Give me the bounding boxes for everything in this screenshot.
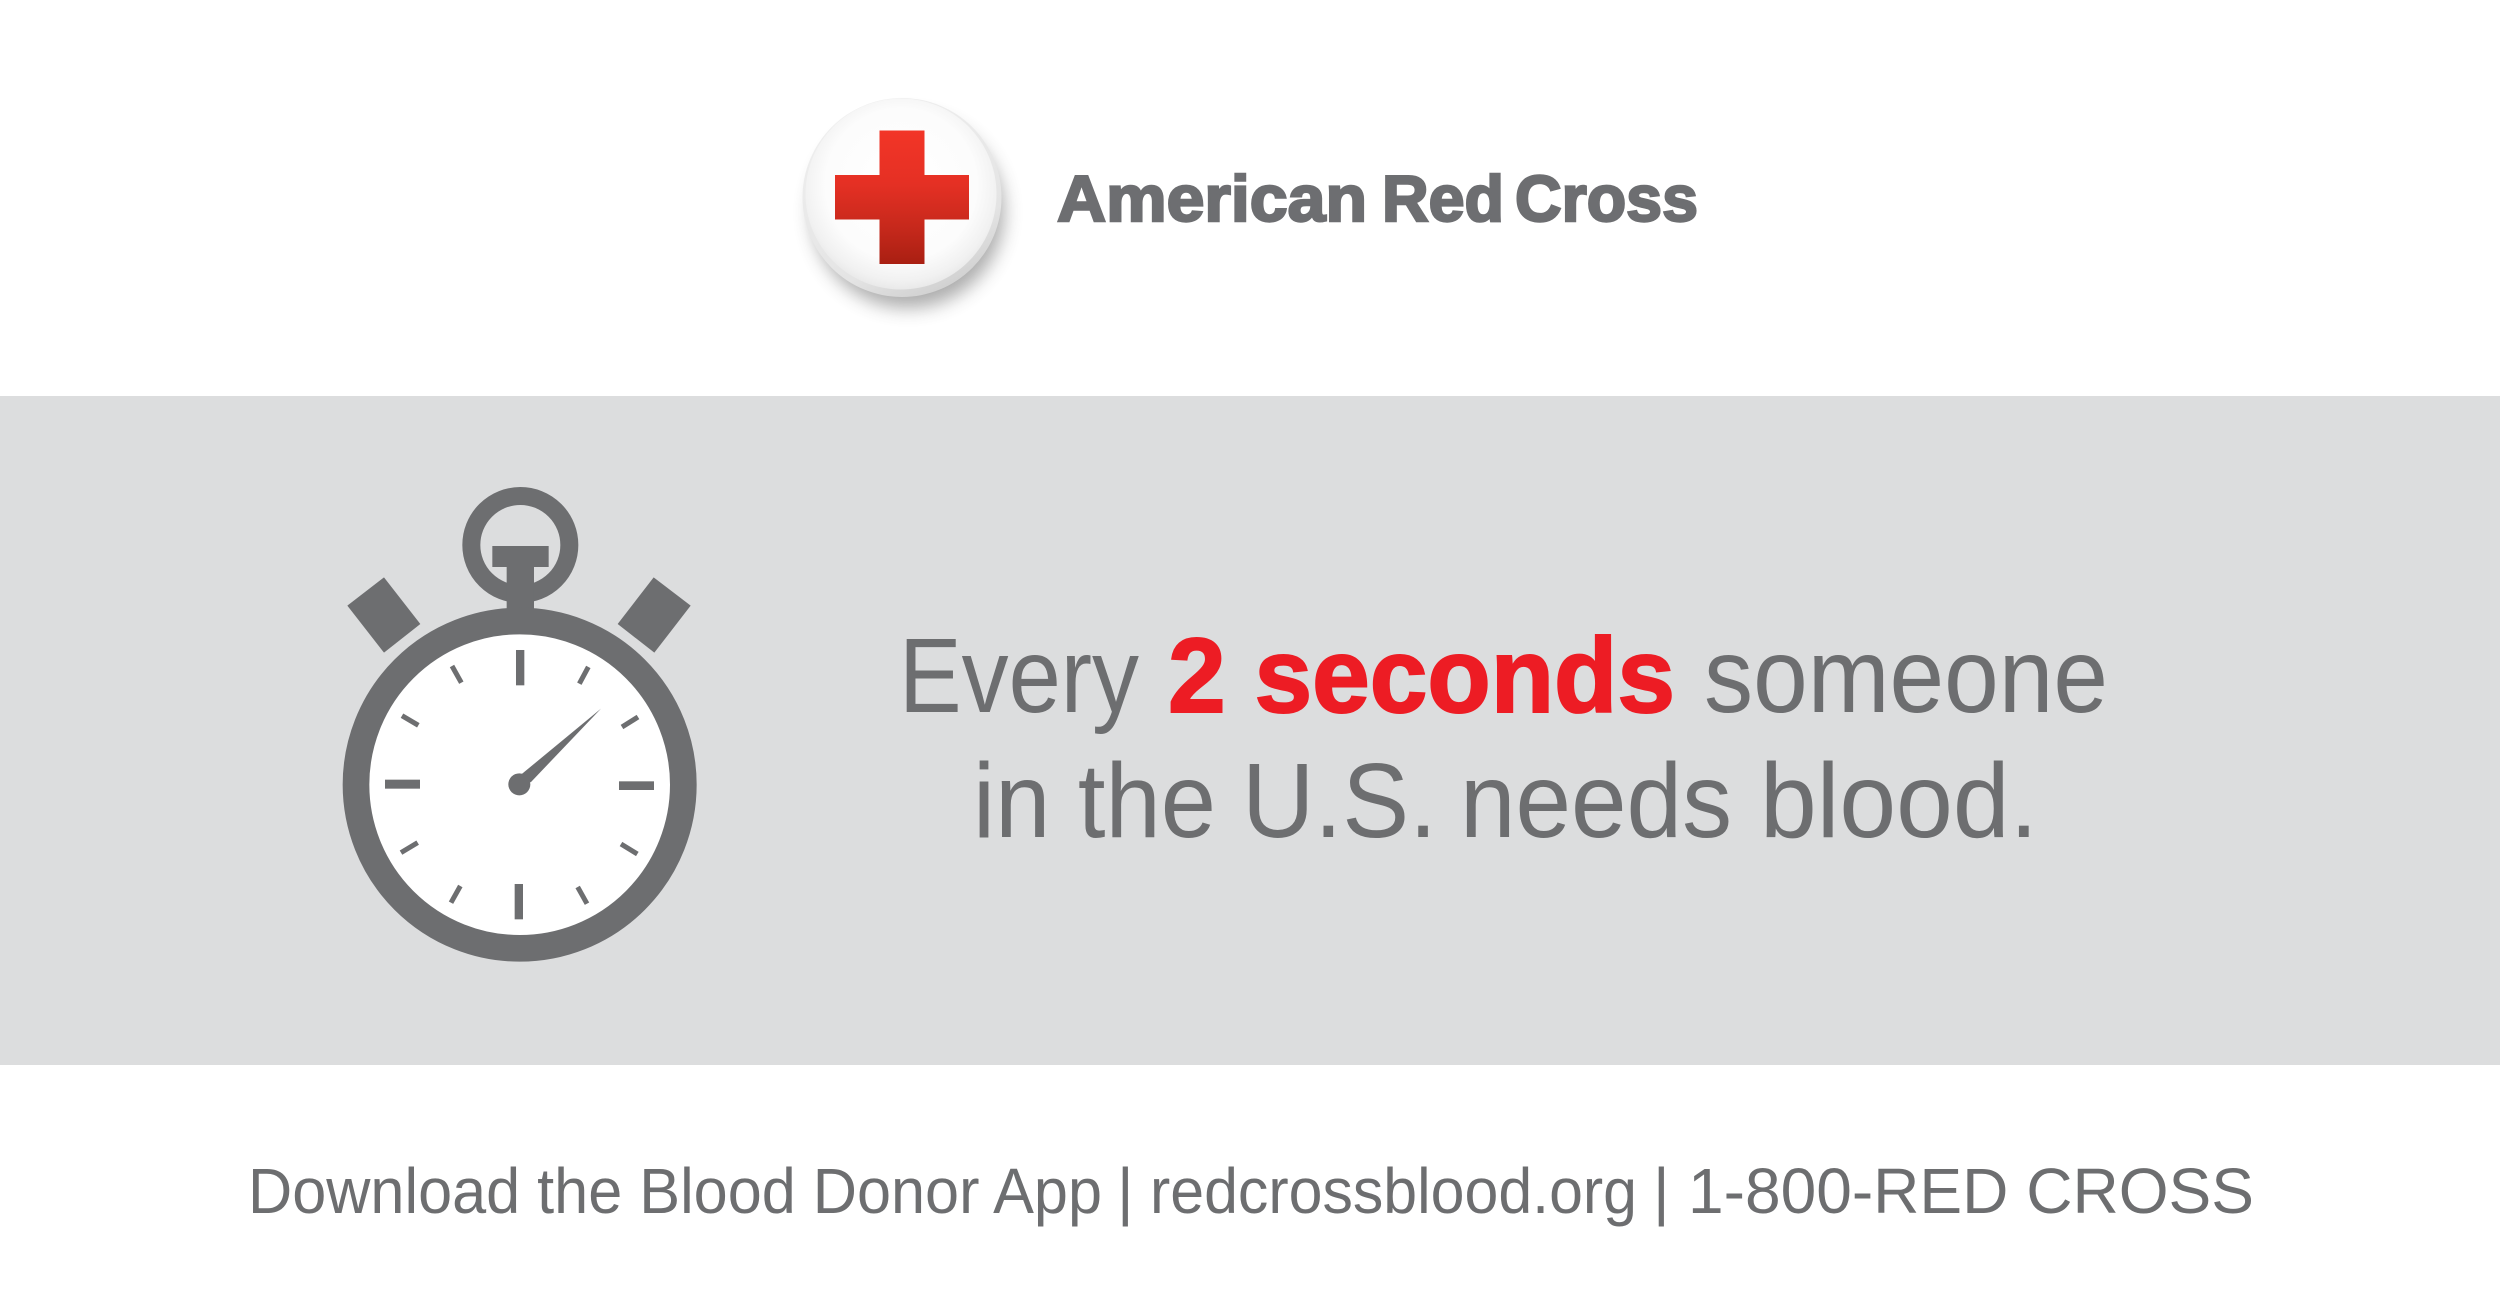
logo wordmark: American xyxy=(1057,162,1367,235)
stopwatch stem xyxy=(492,546,549,613)
headline line 2: U.S. xyxy=(1242,742,1437,860)
headline line 2: in the xyxy=(973,742,1216,860)
headline line 1: someone xyxy=(1704,617,2108,735)
logo wordmark: Cross xyxy=(1515,162,1698,235)
stopwatch crown ring xyxy=(471,496,569,594)
headline line 1 xyxy=(899,617,2108,735)
footer contact line: redcrossblood.org xyxy=(1150,1155,1637,1227)
logo wordmark: Red xyxy=(1382,162,1504,235)
headline xyxy=(899,617,2108,860)
footer contact line: | xyxy=(1117,1155,1134,1227)
panel: grey message band xyxy=(0,396,2500,1065)
icon: red cross badge xyxy=(802,98,1004,308)
headline line 1: 2 seconds xyxy=(1168,617,1675,735)
icon: stopwatch xyxy=(347,496,691,948)
footer contact line: | xyxy=(1653,1155,1670,1227)
left button xyxy=(347,577,420,653)
headline line 2: blood. xyxy=(1760,742,2038,860)
logo: American Red Cross xyxy=(802,98,1698,308)
stopwatch hand xyxy=(508,709,601,795)
headline line 2: needs xyxy=(1460,742,1732,860)
footer contact line: 1-800-RED CROSS xyxy=(1688,1155,2254,1227)
logo wordmark xyxy=(1057,162,1698,235)
headline line 1: Every xyxy=(899,617,1139,735)
footer contact line xyxy=(248,1155,2254,1227)
footer contact line: Download the Blood Donor App xyxy=(248,1155,1102,1227)
headline line 2 xyxy=(973,742,2038,860)
tick marks xyxy=(385,650,654,919)
right button xyxy=(618,577,691,653)
stopwatch body xyxy=(356,621,683,948)
